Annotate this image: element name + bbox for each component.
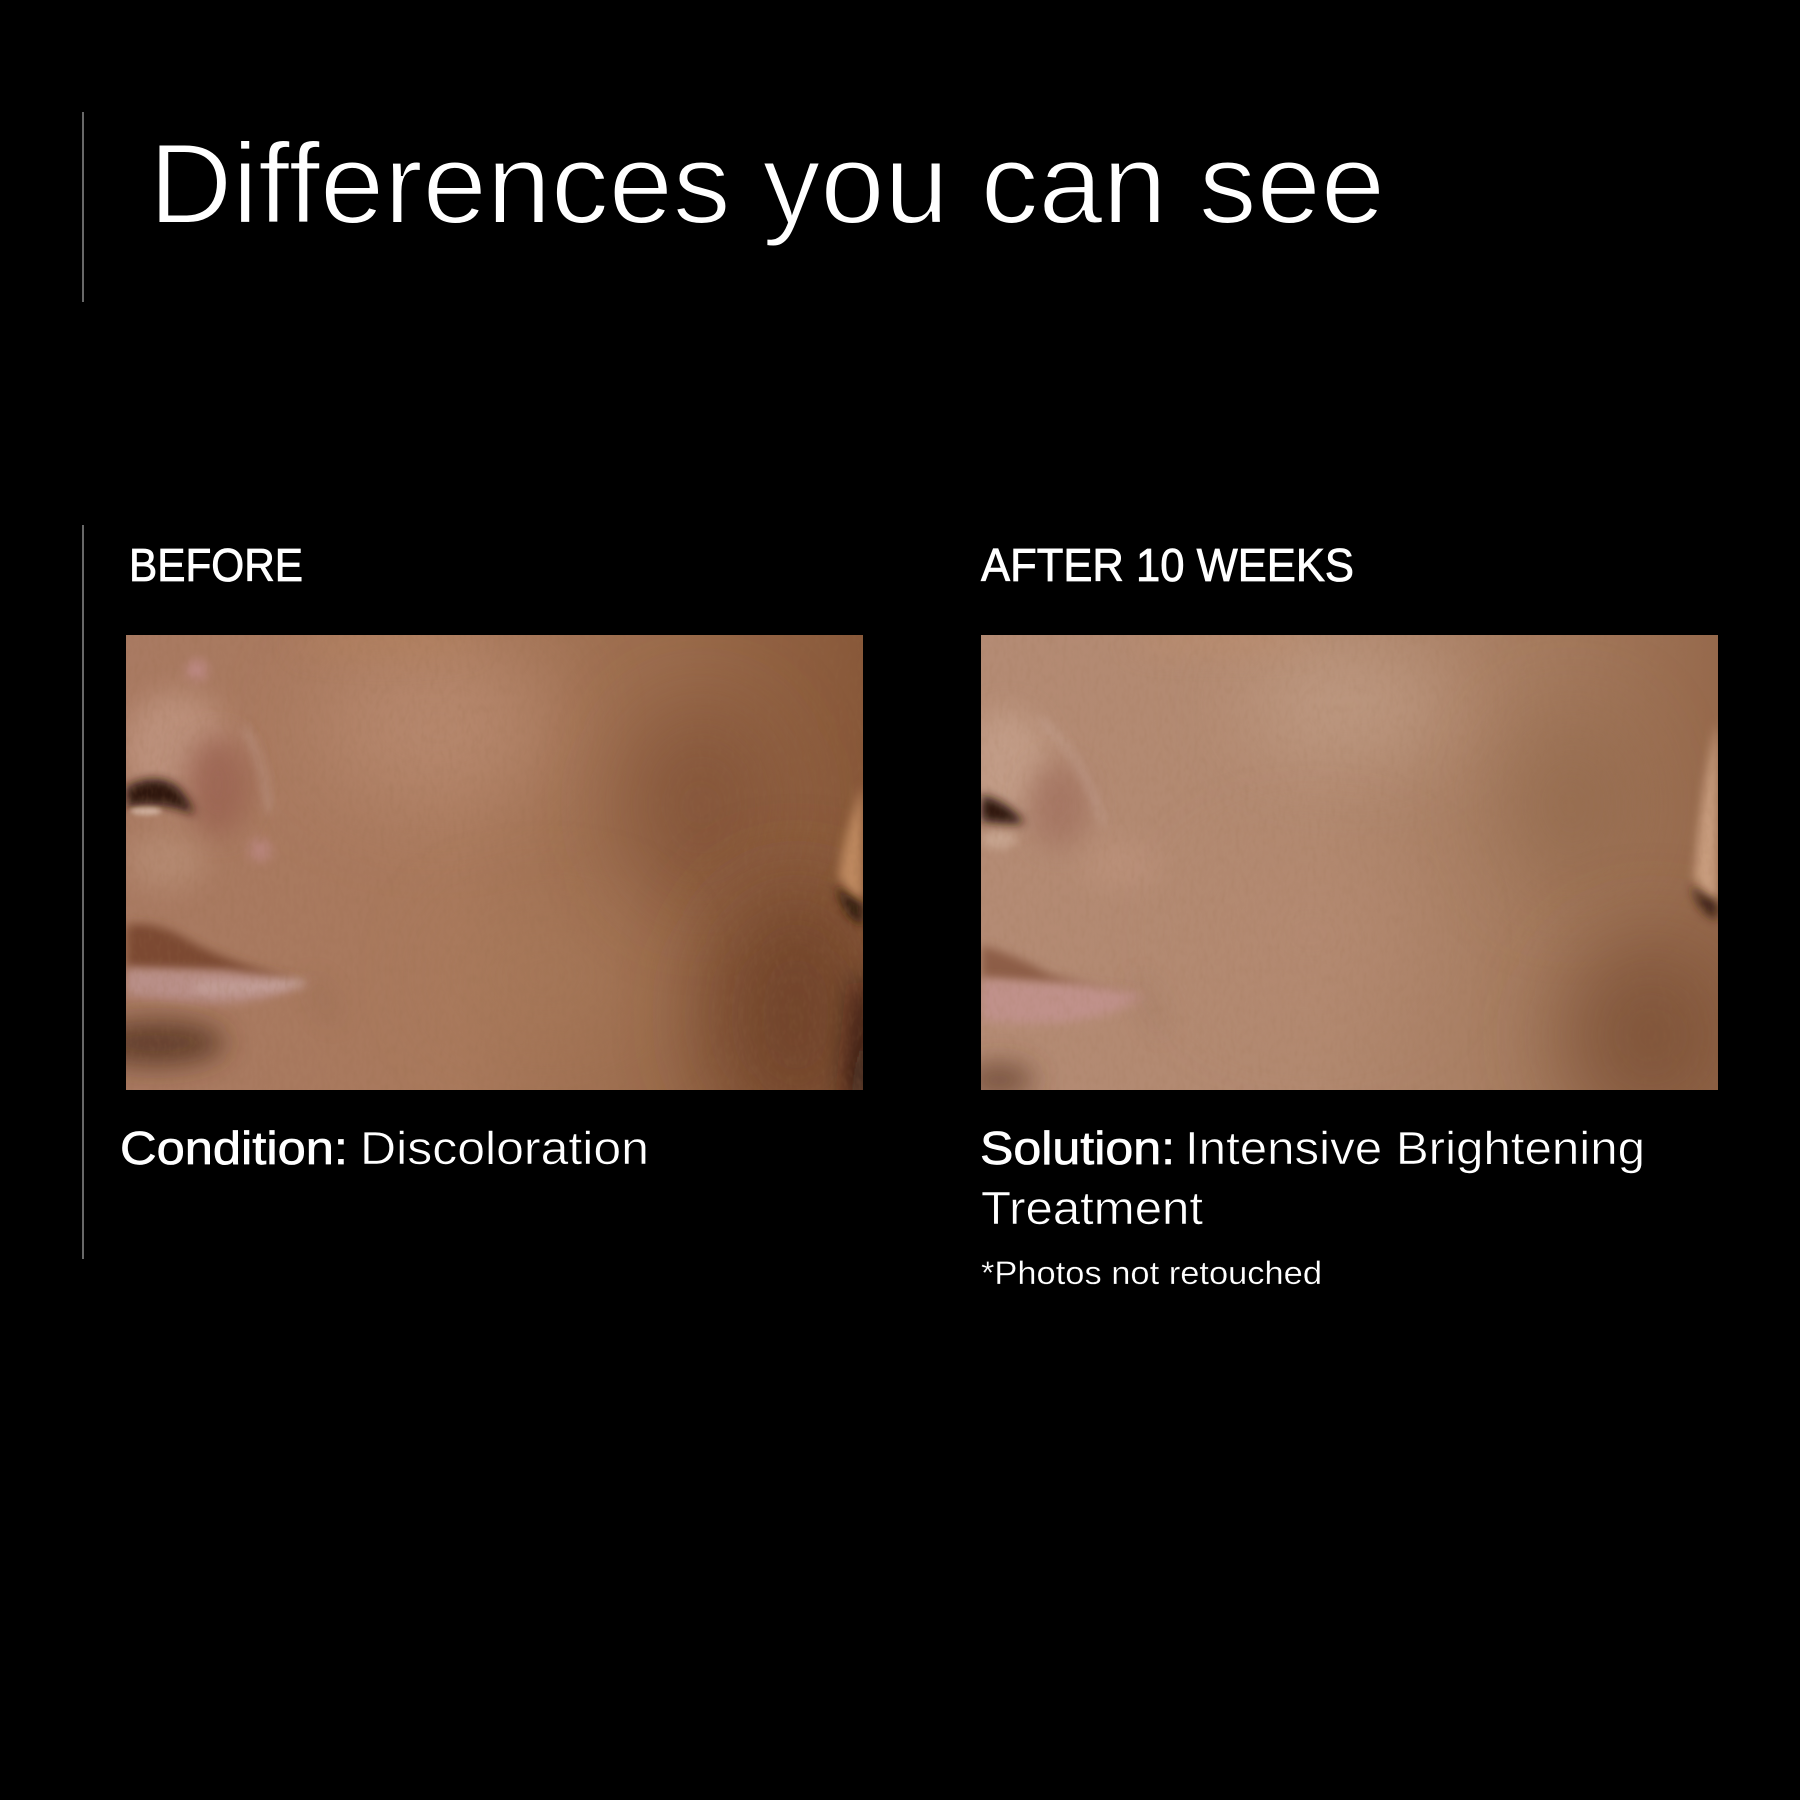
- caption: condition: Condition:: [120, 1122, 348, 1174]
- heading: after 10 weeks: AFTER 10 WEEKS: [981, 539, 1354, 591]
- mouth: [981, 943, 1094, 986]
- skin texture: [128, 788, 861, 1083]
- header accent rule: [82, 112, 84, 302]
- caption: solution: Solution:: [980, 1122, 1175, 1174]
- caption value: intensive brightening: Intensive Brightening: [1185, 1122, 1645, 1174]
- caption value: discoloration: Discoloration: [360, 1122, 649, 1174]
- title: Differences you can see: [149, 121, 1385, 248]
- caption value: treatment: Treatment: [981, 1182, 1203, 1234]
- footnote: *Photos not retouched: [981, 1255, 1322, 1291]
- panel: after 10 weeks: [963, 539, 1741, 1291]
- nose: [981, 710, 1046, 810]
- ear and shadow: [1694, 720, 1718, 903]
- mouth: [126, 919, 284, 978]
- panel: before: [122, 548, 863, 1165]
- comparison section rule: [82, 525, 84, 1259]
- nose: [121, 692, 231, 808]
- photo: before, face with discoloration: [126, 635, 863, 1090]
- ear and shadow: [839, 785, 863, 903]
- photo: after, brighter even skin: [981, 635, 1718, 1090]
- heading: before: BEFORE: [129, 539, 303, 591]
- skin texture: [981, 635, 1718, 1090]
